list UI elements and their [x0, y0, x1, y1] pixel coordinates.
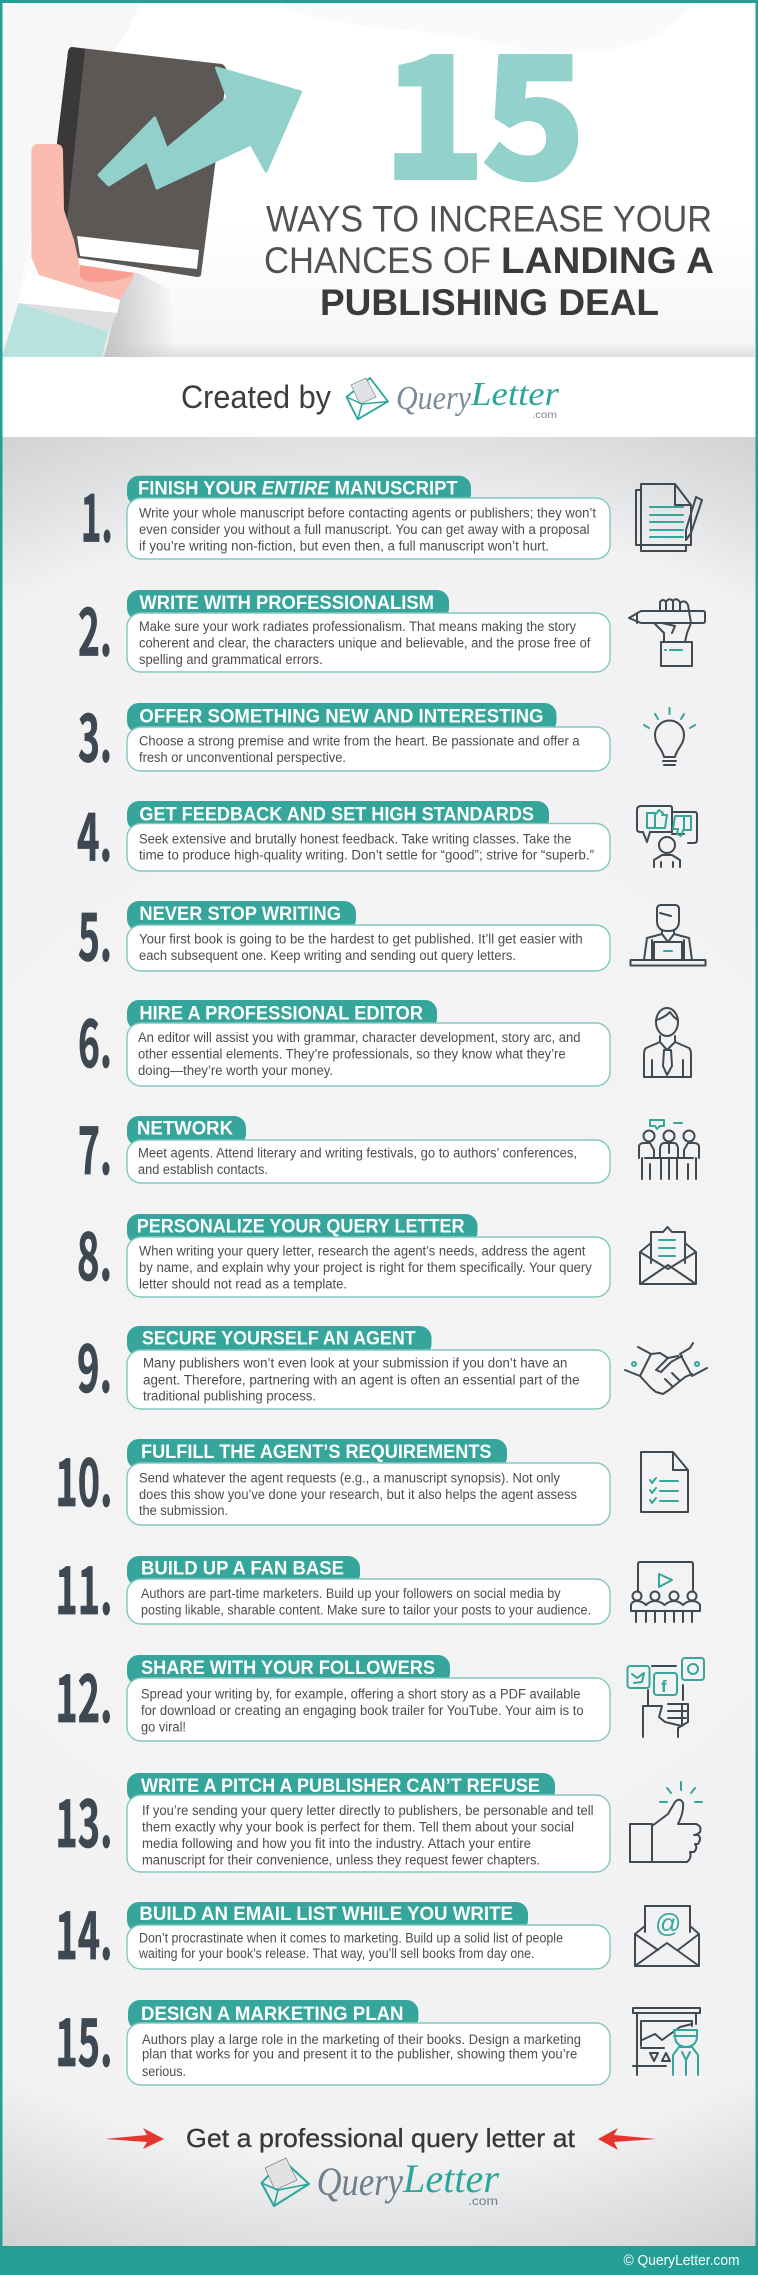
body — [127, 1350, 610, 1409]
body — [127, 1925, 610, 1969]
icon: businessman — [644, 1008, 691, 1077]
step 15 — [55, 1990, 700, 2086]
step 9 — [77, 1316, 707, 1412]
arrow: right red — [598, 2128, 656, 2150]
body: agent. Therefore, partnering with an agent is often an essential part of the — [143, 1372, 580, 1387]
step 2 — [78, 580, 705, 676]
body — [127, 925, 610, 971]
bottom logo: QueryLetter — [262, 2156, 499, 2208]
logo: QueryLetter — [346, 376, 560, 421]
title text: WAYS TO INCREASE YOUR — [266, 198, 712, 240]
icon: handshake — [625, 1343, 707, 1394]
icon: hand holding phone with social media: f — [661, 1677, 667, 1696]
body: Choose a strong premise and write from the heart. Be passionate and offer a — [139, 734, 580, 749]
heading: WRITE A PITCH A PUBLISHER CAN’T REFUSE — [141, 1776, 540, 1797]
body: Your first book is going to be the hardest to get published. It’ll get easier with — [139, 931, 583, 946]
body: even consider you without a full manuscript. You can get away with a proposal — [139, 522, 590, 537]
body: spelling and grammatical errors. — [139, 652, 323, 667]
book — [56, 47, 227, 277]
heading: BUILD AN EMAIL LIST WHILE YOU WRITE — [139, 1904, 513, 1925]
arrow: left red — [105, 2128, 164, 2149]
heading — [127, 801, 549, 831]
body — [127, 1140, 610, 1183]
number: 11. — [55, 1538, 112, 1634]
body: coherent and clear, the characters unique and believable, and the prose free of — [139, 636, 591, 651]
heading: DESIGN A MARKETING PLAN — [141, 2004, 404, 2025]
body: and establish contacts. — [138, 1162, 268, 1177]
body: Meet agents. Attend literary and writing festivals, go to authors’ conferences, — [138, 1145, 577, 1160]
body: fresh or unconventional perspective. — [139, 750, 346, 765]
heading — [127, 1556, 360, 1586]
step 10 — [55, 1430, 688, 1526]
bottom logo: QueryLetter: Query — [317, 2159, 403, 2204]
bottom logo: QueryLetter: .com — [468, 2196, 498, 2208]
icon: open envelope with letter — [640, 1227, 696, 1284]
body: waiting for your book’s release. That way, you’ll sell books from day one. — [138, 1946, 534, 1961]
body: When writing your query letter, research the agent’s needs, address the agent — [139, 1243, 586, 1258]
body: Write your whole manuscript before contacting agents or publishers; they won’t — [139, 505, 596, 520]
heading — [128, 2000, 418, 2030]
number: 7. — [78, 1098, 112, 1194]
heading: GET FEEDBACK AND SET HIGH STANDARDS — [139, 805, 534, 826]
body: does this show you’ve done your research, but it also helps the agent assess — [139, 1487, 577, 1502]
body: doing—they’re worth your money. — [138, 1063, 333, 1078]
body: Make sure your work radiates professionalism. That means making the story — [139, 619, 576, 634]
body: Many publishers won’t even look at your submission if you don’t have an — [143, 1356, 567, 1371]
body: other essential elements. They’re professionals, so they know what they’re — [138, 1047, 566, 1062]
icon: thumbs up — [630, 1782, 702, 1862]
heading — [127, 1326, 432, 1356]
step 6 — [78, 991, 691, 1087]
step 7 — [78, 1098, 699, 1194]
body: serious. — [142, 2064, 186, 2079]
number: 15. — [55, 1990, 112, 2086]
call to action: Get a professional query letter at — [186, 2123, 576, 2153]
hand — [31, 144, 135, 300]
title text — [264, 198, 714, 323]
step 3 — [78, 686, 695, 782]
hand shadow — [104, 273, 175, 357]
number: 13. — [55, 1771, 112, 1867]
footer bar — [0, 2246, 758, 2275]
body: Authors play a large role in the marketing of their books. Design a marketing — [142, 2032, 581, 2047]
step 11 — [55, 1538, 700, 1634]
body: by name, and explain why your project is right for them specifically. Your query — [139, 1260, 592, 1275]
grey content panel — [0, 437, 758, 2246]
body: them exactly why your book is perfect for them. Tell them about your social — [142, 1820, 574, 1835]
step 1 — [81, 466, 702, 562]
icon: email envelope: @ — [655, 1908, 681, 1938]
body — [127, 727, 610, 771]
body: Seek extensive and brutally honest feedback. Take writing classes. Take the — [139, 831, 571, 846]
heading — [127, 1439, 507, 1469]
icon: person at laptop — [630, 905, 706, 966]
heading: WRITE WITH PROFESSIONALISM — [139, 593, 434, 614]
body: traditional publishing process. — [143, 1389, 316, 1404]
step 13 — [55, 1771, 702, 1872]
heading: SHARE WITH YOUR FOLLOWERS — [141, 1658, 435, 1679]
body: go viral! — [141, 1719, 186, 1734]
sleeve — [2, 303, 117, 357]
body: for download or creating an engaging book trailer for YouTube. Your aim is to — [141, 1703, 584, 1718]
body: media following and how you fit into the industry. Attach your entire — [142, 1836, 531, 1851]
heading: NETWORK — [137, 1118, 233, 1139]
heading: OFFER SOMETHING NEW AND INTERESTING — [139, 706, 544, 727]
title text: LANDING A — [501, 240, 714, 281]
logo: QueryLetter: Letter — [470, 376, 560, 413]
body: letter should not read as a template. — [139, 1276, 347, 1291]
heading — [127, 1773, 555, 1803]
body: the submission. — [139, 1503, 228, 1518]
number: 3. — [78, 686, 112, 782]
heading — [127, 901, 356, 931]
body — [127, 1023, 610, 1086]
heading — [127, 1116, 246, 1146]
header panel — [0, 0, 758, 357]
number: 8. — [77, 1204, 112, 1300]
heading — [127, 1000, 437, 1030]
heading — [127, 1214, 478, 1244]
shirt cuff — [18, 272, 120, 313]
footer bar: © QueryLetter.com — [624, 2252, 740, 2269]
body: manuscript for their convenience, unless they request fewer chapters. — [142, 1852, 540, 1867]
created by band — [0, 357, 758, 437]
body: Don’t procrastinate when it comes to marketing. Build up a solid list of people — [139, 1931, 563, 1946]
heading: HIRE A PROFESSIONAL EDITOR — [139, 1004, 423, 1025]
icon: email envelope — [635, 1906, 699, 1966]
icon: feedback speech bubbles — [637, 806, 697, 867]
number: 2. — [78, 580, 112, 676]
icon: hand holding phone with social media — [628, 1658, 704, 1737]
number: 1. — [81, 466, 113, 562]
illustration: hand holding book with rising arrow — [2, 47, 301, 357]
heading — [127, 476, 471, 506]
icon: networking meeting — [639, 1120, 699, 1179]
body: An editor will assist you with grammar, character development, story arc, and — [138, 1030, 580, 1045]
body — [127, 1579, 610, 1624]
body: Send whatever the agent requests (e.g., a manuscript synopsis). Not only — [139, 1470, 560, 1486]
call to action — [105, 2123, 656, 2153]
body: time to produce high-quality writing. Don’t settle for “good”; strive for “superb.” — [139, 848, 594, 863]
number: 5. — [78, 885, 112, 981]
step 14 — [55, 1883, 699, 1979]
icon: presentation board with presenter — [633, 2008, 700, 2075]
heading: NEVER STOP WRITING — [139, 904, 341, 925]
heading — [127, 703, 556, 733]
body — [127, 824, 610, 871]
number: 10. — [55, 1430, 112, 1526]
number: 6. — [78, 991, 112, 1087]
number: 9. — [77, 1316, 112, 1412]
body — [127, 1463, 610, 1525]
bottom logo: QueryLetter: Letter — [402, 2156, 499, 2201]
icon: fist holding pencil — [629, 599, 705, 666]
heading — [127, 1902, 528, 1932]
icon: audience watching video — [631, 1562, 700, 1622]
heading — [127, 1655, 450, 1685]
body — [127, 498, 610, 559]
step 5 — [78, 885, 706, 981]
heading: FINISH YOUR ENTIRE MANUSCRIPT — [138, 478, 458, 499]
step 12 — [55, 1646, 704, 1742]
body: Spread your writing by, for example, offering a short story as a PDF available — [141, 1686, 580, 1701]
heading: SECURE YOURSELF AN AGENT — [142, 1328, 416, 1349]
title text: CHANCES OF — [264, 240, 491, 281]
logo: QueryLetter: Query — [396, 380, 472, 417]
icon: document checklist — [641, 1452, 688, 1512]
body: each subsequent one. Keep writing and sending out query letters. — [139, 948, 516, 963]
body: posting likable, sharable content. Make sure to tailor your posts to your audience. — [141, 1602, 591, 1617]
number: 4. — [77, 785, 112, 881]
step 8 — [77, 1204, 696, 1300]
title text: PUBLISHING DEAL — [320, 282, 659, 323]
body — [127, 1795, 610, 1872]
body — [127, 613, 610, 672]
heading: PERSONALIZE YOUR QUERY LETTER — [137, 1216, 465, 1237]
body: Authors are part-time marketers. Build up your followers on social media by — [141, 1586, 561, 1601]
body: plan that works for you and present it to the publisher, showing them you’re — [142, 2047, 577, 2062]
icon: light bulb — [644, 708, 695, 765]
heading — [127, 590, 449, 620]
heading: FULFILL THE AGENT’S REQUIREMENTS — [141, 1442, 492, 1463]
body: if you’re writing non-fiction, but even then, a full manuscript won’t hurt. — [139, 538, 549, 553]
step 4 — [77, 785, 697, 881]
body — [127, 1237, 610, 1297]
created by band: Created by — [181, 379, 331, 415]
body — [127, 2023, 610, 2085]
rising arrow — [99, 68, 301, 188]
number: 14. — [55, 1883, 112, 1979]
body — [127, 1678, 610, 1741]
icon: manuscript pages — [636, 484, 702, 551]
heading: BUILD UP A FAN BASE — [141, 1559, 344, 1580]
number: 12. — [55, 1646, 112, 1742]
body: If you’re sending your query letter directly to publishers, be personable and tell — [142, 1803, 594, 1818]
logo: QueryLetter: .com — [532, 410, 557, 421]
